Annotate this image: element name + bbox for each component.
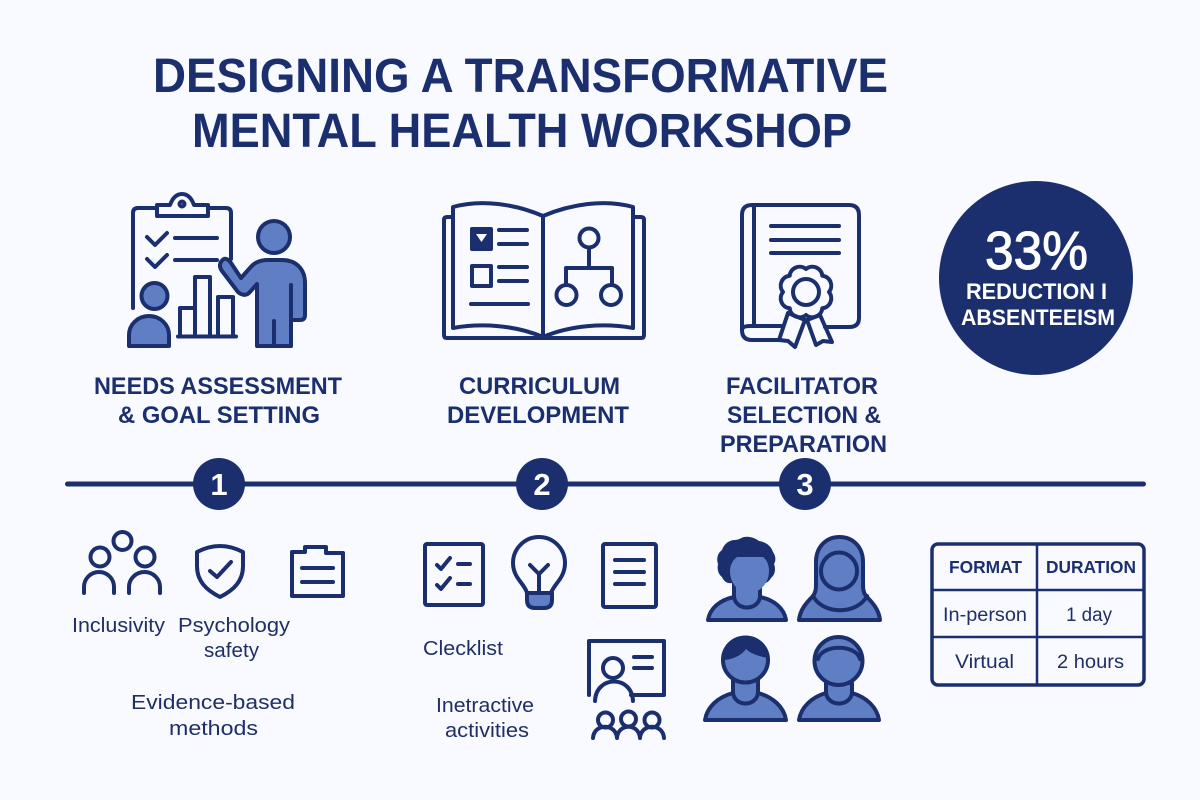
table: format and duration: 2 hours: [1057, 652, 1124, 673]
labels: middle group: Clecklist: [423, 638, 503, 660]
icon: safety shield: [197, 546, 243, 597]
icon: clipboard with presenter and chart: [129, 194, 305, 346]
heading: needs assessment: NEEDS ASSESSMENT: [94, 373, 342, 400]
table: format and duration: [932, 544, 1144, 685]
timeline with numbered steps: 1: [210, 467, 228, 502]
avatar: curly hair: [708, 537, 786, 620]
timeline with numbered steps: 3: [796, 467, 814, 502]
labels: middle group: Inetractive: [436, 695, 534, 717]
table: format and duration: DURATION: [1046, 557, 1136, 577]
timeline with numbered steps: [65, 458, 1146, 510]
title: MENTAL HEALTH WORKSHOP: [192, 105, 852, 158]
labels: left group: Evidence-based: [131, 692, 295, 714]
icon: checklist: [425, 544, 483, 605]
icon: open curriculum book: [444, 203, 644, 338]
labels: left group: [72, 615, 295, 740]
table: format and duration: FORMAT: [949, 557, 1022, 577]
labels: middle group: activities: [445, 720, 529, 742]
labels: left group: Inclusivity: [72, 615, 165, 637]
title: DESIGNING A TRANSFORMATIVE: [153, 50, 888, 103]
icon: inclusivity group: [84, 532, 160, 593]
icon: evidence clipboard: [292, 547, 343, 596]
heading: facilitator selection: SELECTION &: [727, 402, 881, 429]
stat badge: REDUCTION I: [966, 279, 1107, 304]
table: format and duration: Virtual: [955, 652, 1014, 673]
table: format and duration: 1 day: [1066, 605, 1112, 626]
labels: left group: methods: [169, 718, 258, 740]
heading: facilitator selection: [720, 373, 887, 458]
heading: facilitator selection: PREPARATION: [720, 431, 887, 458]
avatar: short hair: [705, 636, 786, 720]
icon: facilitator certificate book: [742, 205, 859, 347]
stat badge: [939, 181, 1133, 375]
heading: needs assessment: [94, 373, 342, 429]
heading: needs assessment: & GOAL SETTING: [118, 402, 320, 429]
stat badge: 33%: [985, 221, 1088, 281]
heading: curriculum development: [447, 373, 629, 429]
labels: left group: Psychology: [178, 615, 290, 637]
heading: curriculum development: DEVELOPMENT: [447, 402, 629, 429]
title: [153, 50, 888, 158]
labels: middle group: [423, 638, 534, 742]
icon: document: [603, 544, 656, 607]
icon: light bulb: [513, 537, 565, 608]
labels: left group: safety: [204, 640, 259, 662]
heading: curriculum development: CURRICULUM: [459, 373, 620, 400]
heading: facilitator selection: FACILITATOR: [726, 373, 878, 400]
avatar: hijab: [799, 537, 880, 620]
icon: presenter and audience: [589, 641, 664, 738]
facilitator avatars: [705, 537, 880, 720]
timeline with numbered steps: 2: [533, 467, 551, 502]
stat badge: ABSENTEEISM: [961, 305, 1115, 330]
avatar: headband: [799, 637, 879, 720]
table: format and duration: In-person: [943, 605, 1027, 626]
